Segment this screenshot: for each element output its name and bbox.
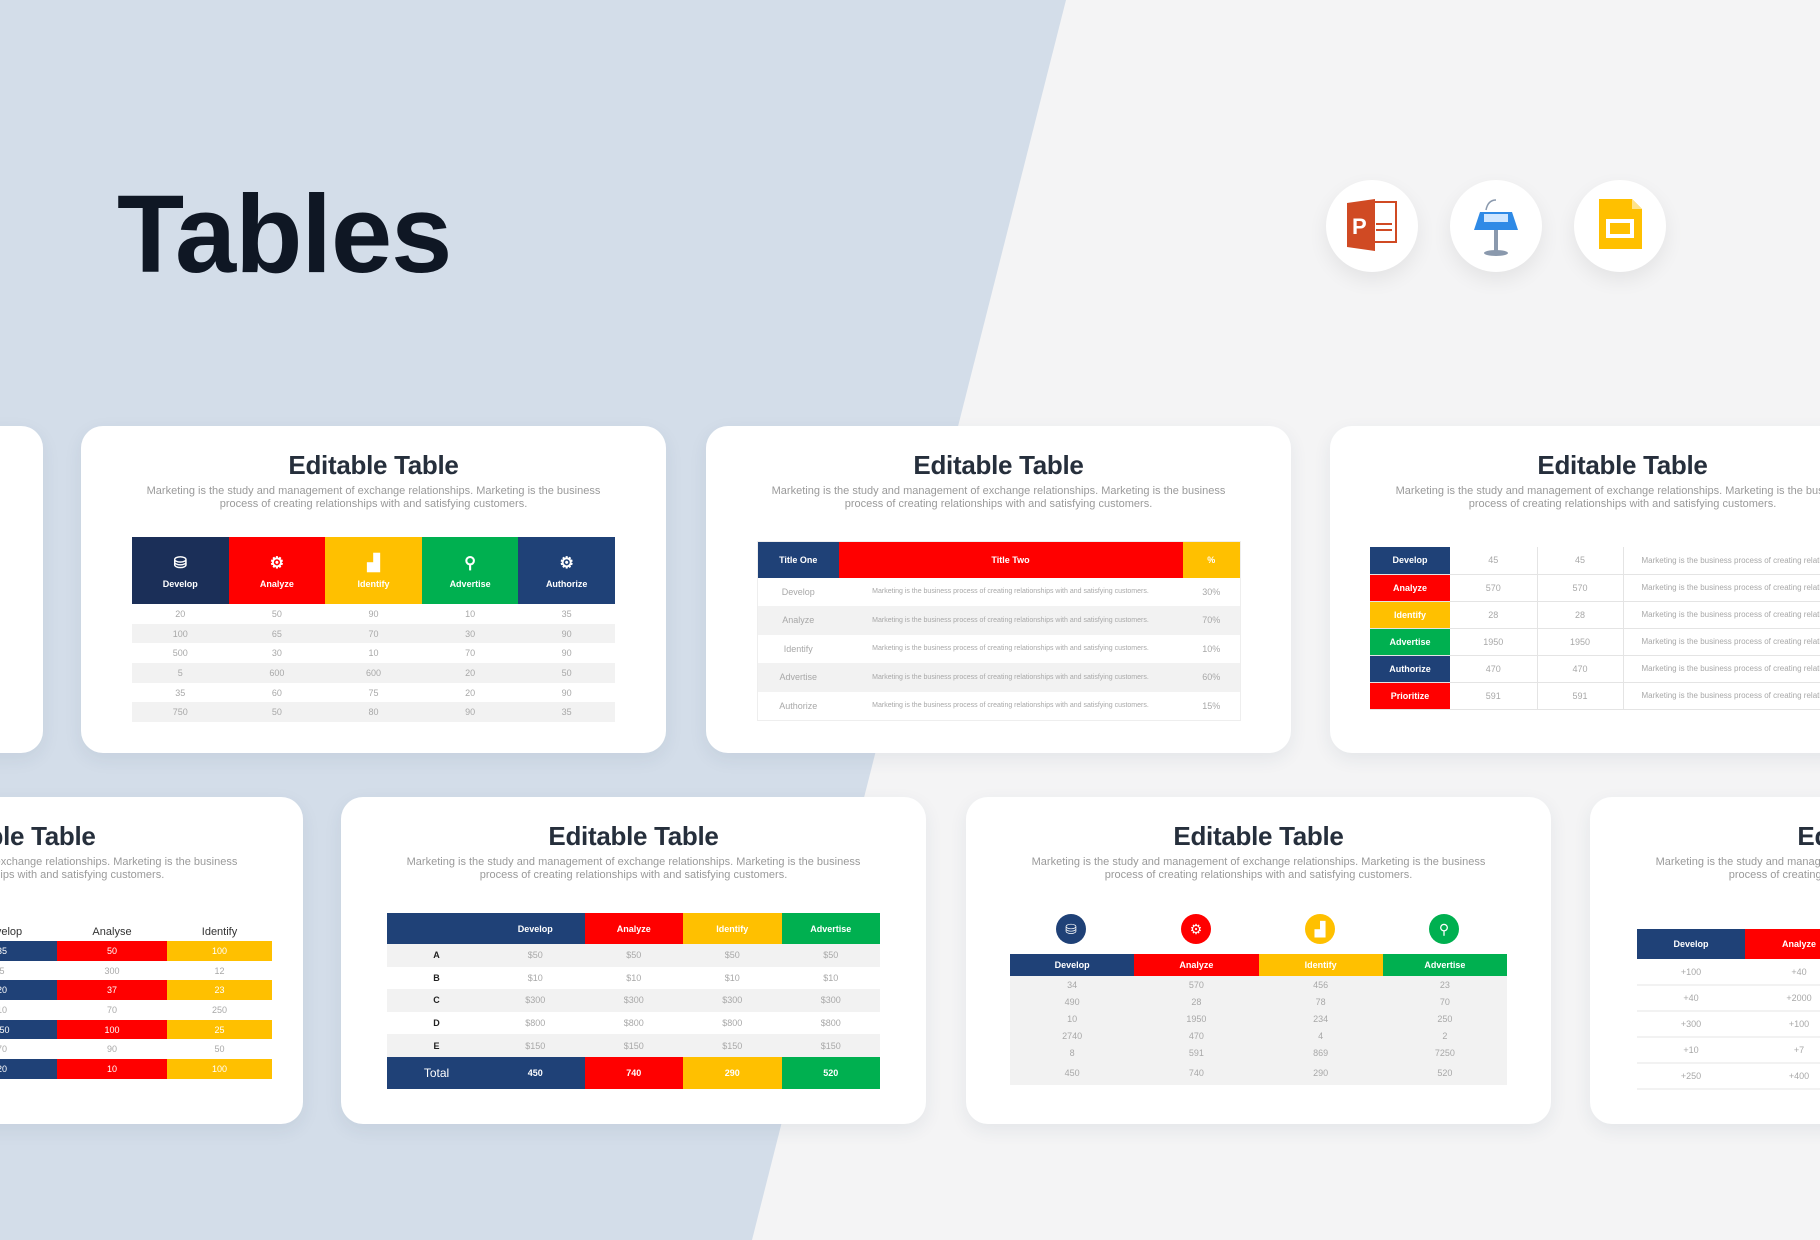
table 6: 34 xyxy=(1067,980,1077,990)
table 1: Authorize xyxy=(546,578,587,588)
panel: card 2 title table: Editable Table xyxy=(913,450,1084,480)
panel: partial card row2 right xyxy=(1590,797,1820,1124)
table 5: 520 xyxy=(823,1068,838,1078)
table 5: C xyxy=(433,995,440,1005)
table 1: 35 xyxy=(562,707,572,717)
table 2: 10% xyxy=(1202,644,1220,654)
table 2: 60% xyxy=(1202,672,1220,682)
table 5: $10 xyxy=(528,973,543,983)
title: Tables xyxy=(117,173,451,296)
table 6: 456 xyxy=(1313,980,1328,990)
panel: partial card row1 left xyxy=(0,426,43,753)
table 5: $300 xyxy=(821,995,841,1005)
table 5: D xyxy=(433,1018,440,1028)
table 5 xyxy=(387,913,880,1089)
icon: advertise xyxy=(1429,914,1459,944)
table 6: 234 xyxy=(1313,1014,1328,1024)
table 1: 70 xyxy=(465,648,475,658)
table 1: 750 xyxy=(173,707,188,717)
table 7: +100 xyxy=(1789,1019,1809,1029)
table 5: 290 xyxy=(725,1068,740,1078)
table 7: +40 xyxy=(1791,966,1807,976)
table 7 xyxy=(1637,929,1820,1090)
panel: card 3 row label table xyxy=(1330,426,1820,753)
table 4 striped: 70 xyxy=(107,1005,117,1015)
table 5: $800 xyxy=(624,1018,644,1028)
table 6: 8 xyxy=(1070,1048,1075,1058)
table 1: Identify xyxy=(357,578,389,588)
table 2: Analyze xyxy=(782,615,814,625)
table 2: Develop xyxy=(782,587,815,597)
table 5: $50 xyxy=(626,950,641,960)
table 7: +400 xyxy=(1789,1071,1809,1081)
table 5: Total xyxy=(424,1066,449,1080)
table 2: 15% xyxy=(1202,700,1220,710)
table 3: 570 xyxy=(1572,582,1588,592)
table 5: $800 xyxy=(821,1018,841,1028)
table 1: 10 xyxy=(368,648,378,658)
table 5: $10 xyxy=(725,973,740,983)
panel: card row2 icons table: Editable Table xyxy=(1173,821,1344,851)
table 1: 70 xyxy=(368,629,378,639)
table 4 striped: 37 xyxy=(107,985,117,995)
table 2: Marketing is the business process of creating relationships with and satisfying customers. xyxy=(872,702,1149,709)
table 4 striped: Analyse xyxy=(92,926,132,938)
icon: analyze xyxy=(1181,914,1211,944)
table 1: 90 xyxy=(465,707,475,717)
table 1: 10 xyxy=(465,609,475,619)
table 3: Authorize xyxy=(1389,664,1431,674)
table 1: Analyze xyxy=(260,578,294,588)
table 6: 470 xyxy=(1189,1030,1204,1040)
icon: keynote xyxy=(1450,180,1542,272)
table 6: Identify xyxy=(1305,960,1337,970)
table 5: $800 xyxy=(722,1018,742,1028)
table 3 xyxy=(1370,547,1820,710)
table 3: 470 xyxy=(1486,664,1501,674)
table 1: 80 xyxy=(368,707,378,717)
table 4 striped: 10 xyxy=(107,1064,117,1074)
table 5: Analyze xyxy=(617,924,651,934)
table 5: $150 xyxy=(821,1041,841,1051)
table 3: 45 xyxy=(1488,555,1498,565)
table 5: $50 xyxy=(528,950,543,960)
table 2: Marketing is the business process of creating relationships with and satisfying customers. xyxy=(872,588,1149,595)
table 5: $150 xyxy=(722,1041,742,1051)
table 3: 470 xyxy=(1572,664,1588,674)
table 6: 250 xyxy=(1437,1014,1452,1024)
table 2 xyxy=(757,541,1241,720)
table 3: Prioritize xyxy=(1391,690,1429,700)
table 3: 28 xyxy=(1488,610,1498,620)
table 1: ⛁ xyxy=(174,554,187,572)
table 2: Advertise xyxy=(779,672,817,682)
panel: card 2 title table xyxy=(706,426,1291,753)
panel: card 1 icon header table: Marketing is the study and management of exchange relationships. Marketing is the business process of creating relationships with and satisfying customers. xyxy=(147,485,600,510)
table 3: 591 xyxy=(1572,690,1588,700)
panel: card row2 totals table: Marketing is the study and management of exchange relationships. Marketing is the business process of creating relationships with and satisfying customers. xyxy=(407,856,860,881)
table 7: +300 xyxy=(1681,1019,1701,1029)
icon: powerpoint: P xyxy=(1352,214,1367,239)
table 6 xyxy=(1010,954,1507,1085)
table 1: 50 xyxy=(562,668,572,678)
panel: partial card row2 left xyxy=(0,797,303,1124)
table 6: Analyze xyxy=(1179,960,1213,970)
table 6: 70 xyxy=(1440,996,1450,1006)
table 1: 90 xyxy=(562,688,572,698)
panel: card 1 icon header table: Editable Table xyxy=(288,450,459,480)
table 2: Marketing is the business process of creating relationships with and satisfying customers. xyxy=(872,645,1149,652)
table 1: 60 xyxy=(272,688,282,698)
table 1: 30 xyxy=(465,629,475,639)
table 1: 35 xyxy=(562,609,572,619)
table 1: ⚙ xyxy=(560,554,574,572)
table 6: 869 xyxy=(1313,1048,1328,1058)
table 2: Marketing is the business process of creating relationships with and satisfying customers. xyxy=(872,617,1149,624)
table 4 striped: 100 xyxy=(212,946,227,956)
table 2: Title One xyxy=(779,555,817,565)
table 6: 2740 xyxy=(1062,1030,1082,1040)
table 5: $10 xyxy=(626,973,641,983)
table 6: 450 xyxy=(1065,1068,1080,1078)
table 6: 28 xyxy=(1191,996,1201,1006)
icon: develop xyxy=(1056,914,1086,944)
panel: card 2 title table: Marketing is the study and management of exchange relationships. Marketing is the business process of creating relationships with and satisfying customers. xyxy=(772,485,1225,510)
icon: analyze: ⚙ xyxy=(1190,921,1202,937)
table 7: Develop xyxy=(1673,939,1708,949)
table 7: +2000 xyxy=(1786,993,1812,1003)
table 4 striped: 250 xyxy=(212,1005,227,1015)
icon: develop: ⛁ xyxy=(1065,921,1077,937)
table 5: B xyxy=(433,973,440,983)
table 1: 90 xyxy=(562,629,572,639)
table 5: $50 xyxy=(823,950,838,960)
table 1: ⚙ xyxy=(270,554,284,572)
table 1: 20 xyxy=(465,668,475,678)
table 2: Authorize xyxy=(779,700,817,710)
table 6: 1950 xyxy=(1186,1014,1206,1024)
table 4 striped: 25 xyxy=(214,1025,224,1035)
table 7: +7 xyxy=(1794,1045,1804,1055)
table 1: 600 xyxy=(269,668,284,678)
icon: google slides xyxy=(1574,180,1666,272)
table 1: 35 xyxy=(175,688,185,698)
table 1: 5 xyxy=(178,668,183,678)
panel: card row2 icons table: Marketing is the study and management of exchange relationships. Marketing is the business process of creating relationships with and satisfying customers. xyxy=(1032,856,1485,881)
table 1: 90 xyxy=(368,609,378,619)
table 5: $150 xyxy=(525,1041,545,1051)
table 5: 740 xyxy=(626,1068,641,1078)
panel: card 3 row label table: Editable Table xyxy=(1537,450,1708,480)
icon: powerpoint xyxy=(1326,180,1418,272)
table 4 striped: 100 xyxy=(212,1064,227,1074)
table 3: 1950 xyxy=(1483,636,1503,646)
table 5: 450 xyxy=(528,1068,543,1078)
table 2: Title Two xyxy=(991,555,1030,565)
table 7: +100 xyxy=(1681,966,1701,976)
table 7: +40 xyxy=(1683,993,1699,1003)
table 1: 600 xyxy=(366,668,381,678)
table 5: $50 xyxy=(725,950,740,960)
table 6: 2 xyxy=(1442,1030,1447,1040)
table 1: ▟ xyxy=(367,554,380,572)
table 6: 570 xyxy=(1189,980,1204,990)
table 4 striped: 90 xyxy=(107,1044,117,1054)
table 2: Identify xyxy=(784,644,813,654)
table 5: Identify xyxy=(716,924,748,934)
table 2: Marketing is the business process of creating relationships with and satisfying customers. xyxy=(872,674,1149,681)
table 3: 1950 xyxy=(1570,636,1590,646)
table 5: $300 xyxy=(624,995,644,1005)
table 3: Advertise xyxy=(1389,636,1431,646)
table 6: 78 xyxy=(1316,996,1326,1006)
table 1: Develop xyxy=(163,578,198,588)
table 6: Advertise xyxy=(1424,960,1465,970)
table 1: 65 xyxy=(272,629,282,639)
table 1: 100 xyxy=(173,629,188,639)
table 7: +250 xyxy=(1681,1071,1701,1081)
table 1: Advertise xyxy=(450,578,491,588)
table 3: Identify xyxy=(1394,610,1426,620)
table 3: 591 xyxy=(1486,690,1501,700)
table 4 striped: 300 xyxy=(104,966,120,976)
table 4 striped: 50 xyxy=(214,1044,224,1054)
table 6: Develop xyxy=(1055,960,1090,970)
table 2: 70% xyxy=(1202,615,1220,625)
table 4 striped: 23 xyxy=(214,985,224,995)
panel: card row2 totals table: Editable Table xyxy=(548,821,719,851)
table 4 striped xyxy=(0,926,272,1079)
table 6: 10 xyxy=(1067,1014,1077,1024)
table 5: $300 xyxy=(722,995,742,1005)
table 5: E xyxy=(433,1041,440,1051)
table 6: 490 xyxy=(1065,996,1080,1006)
table 5: Develop xyxy=(518,924,553,934)
table 3: 45 xyxy=(1575,555,1585,565)
table 3: 28 xyxy=(1575,610,1585,620)
table 6: 23 xyxy=(1440,980,1450,990)
table 1: 20 xyxy=(175,609,185,619)
table 3: Develop xyxy=(1392,555,1428,565)
table 5: $150 xyxy=(624,1041,644,1051)
table 5: Advertise xyxy=(810,924,851,934)
table 3: 570 xyxy=(1486,582,1501,592)
table 7: Analyze xyxy=(1782,939,1816,949)
table 4 striped: 50 xyxy=(107,946,117,956)
table 2: % xyxy=(1207,555,1215,565)
table 1: 50 xyxy=(272,609,282,619)
table 4 striped: 100 xyxy=(104,1025,120,1035)
panel: card row2 totals table xyxy=(341,797,926,1124)
table 1: 20 xyxy=(465,688,475,698)
table 6: 7250 xyxy=(1435,1048,1455,1058)
table 3: Analyze xyxy=(1393,582,1427,592)
table 5: A xyxy=(433,950,440,960)
table 4 striped: 12 xyxy=(214,966,224,976)
table 6: 4 xyxy=(1318,1030,1323,1040)
table 7: +10 xyxy=(1683,1045,1699,1055)
icon: advertise: ⚲ xyxy=(1439,921,1449,937)
table 6: 520 xyxy=(1437,1068,1452,1078)
table 6: 591 xyxy=(1189,1048,1204,1058)
table 1: ⚲ xyxy=(464,554,476,572)
table 1: 90 xyxy=(562,648,572,658)
table 6: 740 xyxy=(1189,1068,1204,1078)
table 1: 75 xyxy=(368,688,378,698)
table 5: $10 xyxy=(823,973,838,983)
table 5: $300 xyxy=(525,995,545,1005)
icon: identify xyxy=(1305,914,1335,944)
table 6: 290 xyxy=(1313,1068,1328,1078)
panel: card row2 icons table xyxy=(966,797,1551,1124)
table 1 xyxy=(132,537,615,722)
table 5: $800 xyxy=(525,1018,545,1028)
panel: card 1 icon header table xyxy=(81,426,666,753)
table 1: 30 xyxy=(272,648,282,658)
table 4 striped: Identify xyxy=(202,926,237,938)
icon: identify: ▟ xyxy=(1315,921,1325,937)
table 1: 500 xyxy=(173,648,188,658)
table 1: 50 xyxy=(272,707,282,717)
table 2: 30% xyxy=(1202,587,1220,597)
